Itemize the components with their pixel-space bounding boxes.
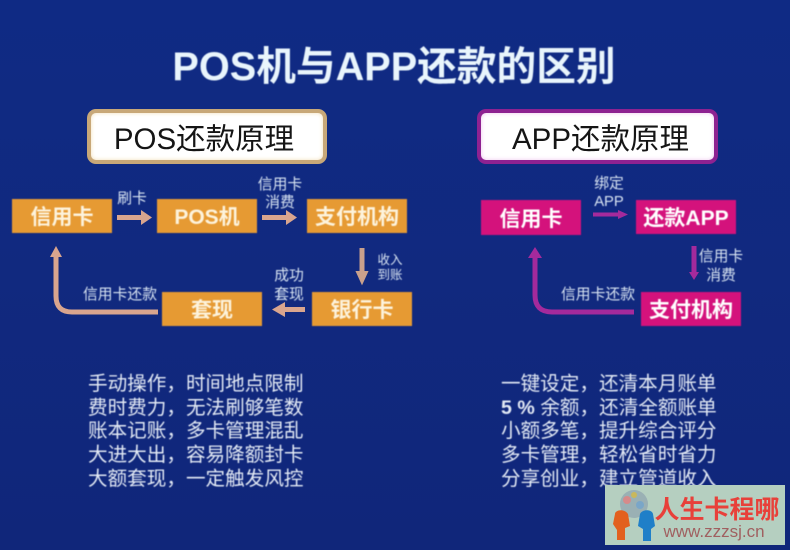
label: card spending: 消费 (265, 195, 295, 211)
text block: APP benefits: 一键设定，还清本月账单 (501, 373, 717, 395)
box: cash out (162, 292, 262, 326)
heading: APP principle: APP还款原理 (512, 122, 689, 156)
icon: two heads (613, 490, 655, 541)
text block: POS drawbacks: 账本记账，多卡管理混乱 (88, 420, 304, 442)
label: card spending (258, 176, 302, 211)
box: bank card (312, 292, 412, 326)
label: income received (377, 252, 402, 282)
watermark url: www.zzzsj.cn (663, 522, 765, 541)
watermark name: 人生卡程哪 (654, 496, 780, 524)
text block: APP benefits: 5%余额，还清全额账单 (501, 397, 717, 419)
box: repayment APP: 还款APP (643, 207, 729, 230)
text block: APP benefits: 小额多笔，提升综合评分 (501, 420, 717, 442)
label: card spending: 信用卡 (258, 177, 302, 193)
text block: POS drawbacks: 大额套现，一定触发风控 (88, 468, 304, 490)
label: bind APP (594, 174, 624, 210)
label: card repayment: 信用卡还款 (561, 287, 635, 303)
box: payment institution (307, 199, 407, 233)
watermark (605, 485, 785, 545)
label: card spending (698, 248, 744, 284)
box: repayment APP (636, 200, 736, 234)
box: payment institution: 支付机构 (315, 206, 399, 229)
box: bank card: 银行卡 (330, 299, 394, 322)
box: POS machine: POS机 (174, 206, 240, 229)
text block: POS drawbacks: 费时费力，无法刷够笔数 (88, 397, 304, 419)
label: bind APP: APP (594, 194, 624, 210)
text block: APP benefits (501, 372, 717, 490)
title: POS机与APP还款的区别 (172, 45, 616, 89)
label: cash out success: 成功 (274, 268, 304, 284)
label: swipe: 刷卡 (117, 191, 147, 207)
box: payment institution (641, 292, 741, 326)
box: credit card (481, 200, 581, 235)
label: cash out success (274, 266, 304, 303)
box: credit card (12, 199, 112, 233)
panel: POS flow (11, 176, 413, 327)
box: credit card: 信用卡 (500, 208, 562, 230)
box: credit card: 信用卡 (30, 206, 94, 229)
label: card spending: 信用卡 (699, 249, 743, 265)
label: bind APP: 绑定 (594, 176, 624, 192)
box: payment institution: 支付机构 (649, 299, 733, 322)
label: income received: 收入 (377, 253, 402, 267)
text block: POS drawbacks (88, 372, 304, 490)
text block: POS drawbacks: 手动操作，时间地点限制 (88, 373, 304, 395)
text block: APP benefits: 分享创业，建立管道收入 (501, 468, 717, 490)
arrows: POS flow (50, 210, 368, 317)
heading: POS principle: POS还款原理 (114, 122, 294, 156)
label: card spending: 消费 (706, 268, 736, 284)
box: cash out: 套现 (191, 299, 233, 322)
label: card repayment: 信用卡还款 (83, 287, 157, 303)
arrows: APP flow (528, 210, 699, 314)
panel: APP flow (480, 174, 744, 327)
box: POS machine (157, 199, 257, 233)
heading: APP principle (477, 109, 718, 164)
label: income received: 到账 (377, 268, 402, 282)
heading: POS principle (87, 109, 327, 164)
text block: APP benefits: 多卡管理，轻松省时省力 (501, 444, 717, 466)
label: cash out success: 套现 (274, 287, 304, 303)
text block: POS drawbacks: 大进大出，容易降额封卡 (88, 444, 304, 466)
